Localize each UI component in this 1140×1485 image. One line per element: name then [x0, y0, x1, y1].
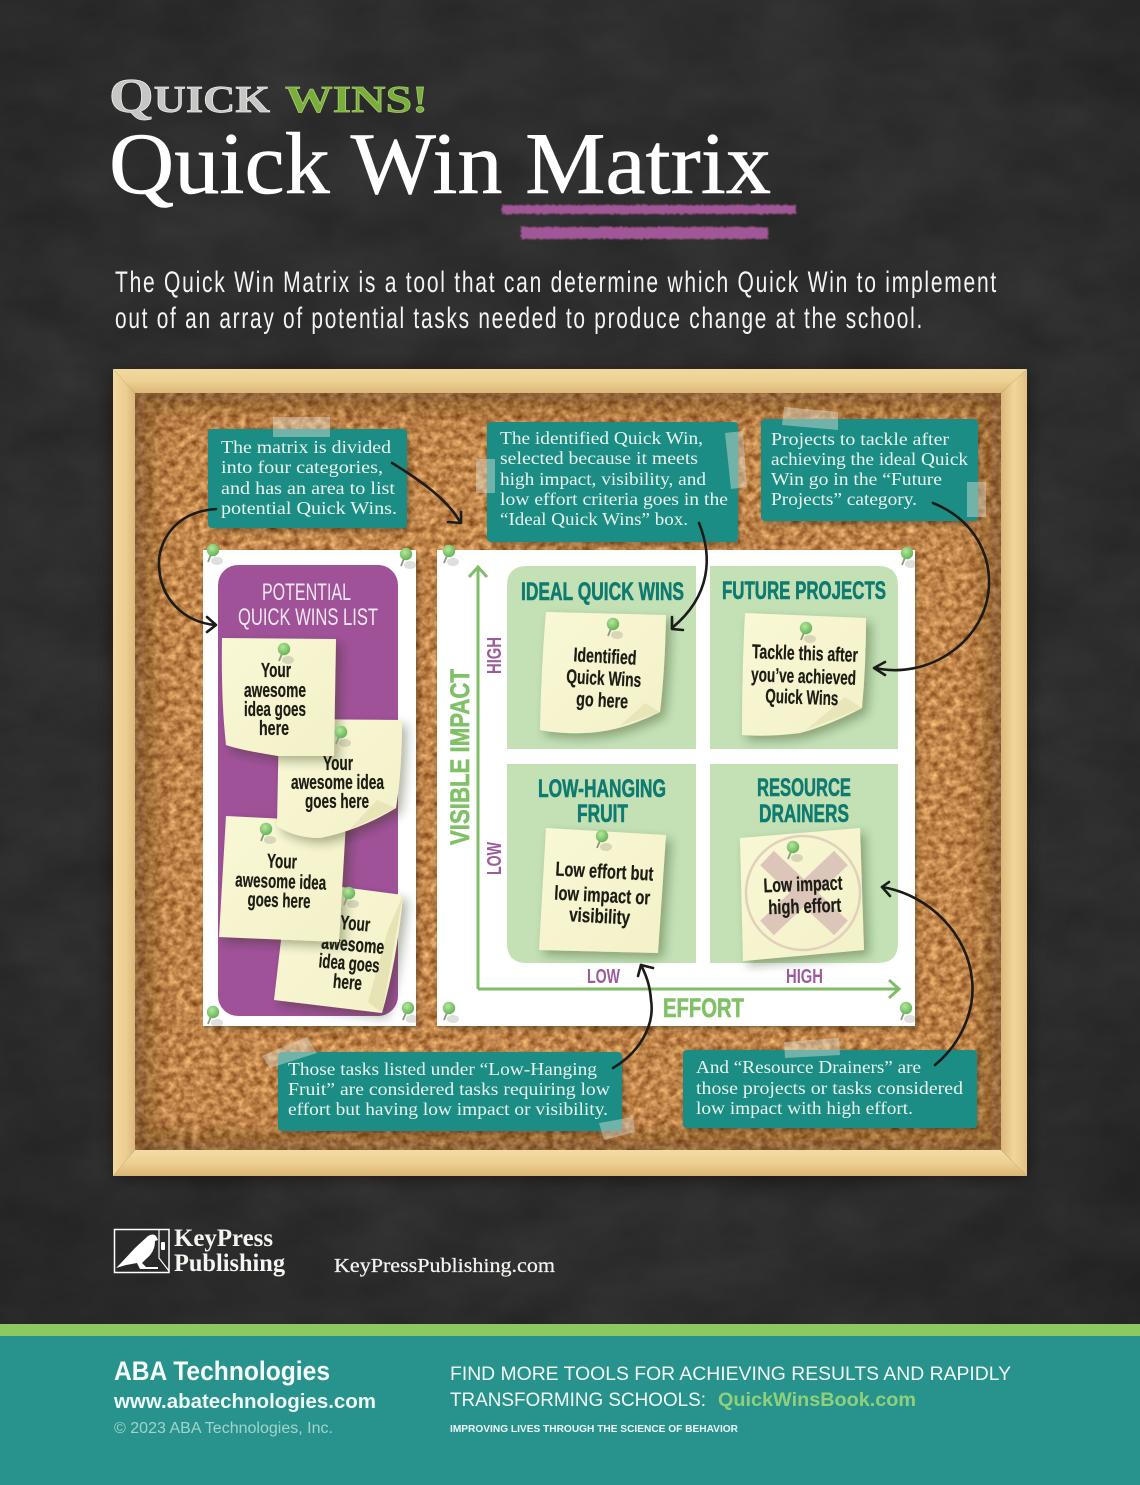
- sticky note 3: Your: [267, 851, 297, 874]
- sticky: tackle this after: Quick Wins: [765, 686, 839, 710]
- note: identified quick win: “Ideal Quick Wins” box.: [500, 509, 688, 529]
- tape: [262, 1037, 635, 1140]
- quadrant: ideal quick wins: IDEAL QUICK WINS: [521, 578, 684, 606]
- note: four categories: and has an area to list: [221, 478, 395, 498]
- footer: ABA Technologies: ABA Technologies: [114, 1356, 330, 1386]
- note: four categories: [208, 429, 407, 528]
- sticky note 2: goes here: [305, 791, 369, 813]
- note: four categories: into four categories,: [221, 457, 383, 477]
- list heading: POTENTIAL: [262, 579, 351, 606]
- arrow: to potential list: [159, 509, 216, 632]
- sticky: low effort: Low effort but: [555, 859, 654, 886]
- sticky note 1: idea goes: [244, 699, 306, 721]
- note: future projects: achieving the ideal Quick: [771, 449, 968, 469]
- list heading: [238, 579, 378, 631]
- main title: Quick Win Matrix: [109, 116, 771, 213]
- vertical axis: visible impact: LOW: [484, 842, 506, 875]
- sticky: identified quick wins: go here: [576, 689, 629, 713]
- tape: [273, 417, 330, 437]
- sticky: low effort: low impact or: [554, 883, 651, 910]
- logo: KeyPress Publishing: Publishing: [174, 1250, 285, 1277]
- sticky: low impact high effort: [740, 828, 864, 961]
- quadrant: future projects: FUTURE PROJECTS: [722, 577, 886, 605]
- icon: pigeon in box: [114, 1230, 169, 1272]
- tape: [784, 1038, 840, 1058]
- footer: ABA Technologies: [113, 1356, 376, 1437]
- sticky note 1: awesome: [244, 680, 306, 702]
- intro paragraph: [115, 266, 998, 335]
- logo: KeyPress Publishing: KeyPress: [174, 1225, 273, 1252]
- sticky: low impact high effort: Low impact: [763, 873, 843, 897]
- vertical axis: visible impact: VISIBLE IMPACT: [445, 669, 475, 845]
- horizontal axis: effort: LOW: [587, 966, 620, 988]
- footer: call to action: TRANSFORMING SCHOOLS:: [450, 1390, 706, 1411]
- vertical axis: visible impact: [445, 567, 506, 989]
- push pins: [207, 544, 917, 1027]
- sticky: low impact high effort: high effort: [768, 895, 842, 919]
- footer band: [0, 1324, 1140, 1485]
- arrow: to low-hanging fruit: [613, 965, 653, 1068]
- quadrant: ideal quick wins: [507, 566, 696, 749]
- note: future projects: Win go in the “Future: [771, 469, 942, 489]
- note: identified quick win: low effort criteria goes in the: [500, 489, 728, 509]
- sticky: identified quick wins: Identified: [573, 644, 637, 670]
- sticky: low effort: [539, 828, 666, 953]
- sticky note 1: here: [259, 718, 289, 740]
- quadrant: low-hanging fruit: LOW-HANGING: [538, 775, 666, 803]
- sticky note 2: awesome idea: [291, 772, 385, 794]
- horizontal axis: effort: HIGH: [786, 966, 823, 988]
- sticky note 2: Your: [323, 753, 353, 775]
- quadrant: resource drainers: DRAINERS: [759, 800, 849, 828]
- list heading: QUICK WINS LIST: [238, 604, 378, 631]
- quadrant: low-hanging fruit: [507, 764, 696, 963]
- tape: [476, 431, 747, 493]
- horizontal axis: effort: EFFORT: [663, 993, 744, 1023]
- footer: ABA Technologies: © 2023 ABA Technologies, Inc.: [114, 1420, 333, 1437]
- quadrant: low-hanging fruit: FRUIT: [577, 800, 628, 828]
- quadrant: future projects: [710, 566, 898, 749]
- note: identified quick win: high impact, visibility, and: [500, 469, 706, 489]
- eyebrow title: Quick Wins!: WINS!: [285, 79, 428, 121]
- arrow: to ideal quick wins area: [392, 463, 461, 523]
- quadrant: resource drainers: [710, 764, 898, 963]
- footer: call to action: IMPROVING LIVES THROUGH THE SCIENCE OF BEHAVIOR: [450, 1423, 738, 1435]
- note: low-hanging fruit: Those tasks listed under “Low-Hanging: [288, 1059, 597, 1079]
- cork board with wooden frame: [113, 369, 1027, 1178]
- footer: call to action: QuickWinsBook.com: [718, 1390, 916, 1411]
- note: low-hanging fruit: effort but having low impact or visibility.: [288, 1099, 608, 1119]
- publisher url: KeyPressPublishing.com: [334, 1255, 555, 1277]
- note: resource drainers: those projects or tasks considered: [696, 1078, 963, 1098]
- sticky: identified quick wins: [540, 612, 666, 733]
- footer: call to action: FIND MORE TOOLS FOR ACHIEVING RESULTS AND RAPIDLY: [450, 1364, 1011, 1385]
- note: resource drainers: [683, 1050, 977, 1128]
- note: resource drainers: low impact with high effort.: [696, 1098, 913, 1118]
- note: identified quick win: selected because it meets: [500, 448, 698, 468]
- eyebrow title: Quick Wins!: [109, 68, 428, 123]
- note: future projects: [761, 419, 978, 521]
- eyebrow title: Quick Wins!: QUICK: [109, 68, 271, 123]
- sticky note 4: here: [332, 971, 363, 995]
- arrow: to resource drainers: [882, 882, 973, 1065]
- sticky note 4: Your: [339, 912, 371, 937]
- sticky note 1: [222, 638, 336, 756]
- sticky note 3: [219, 816, 346, 942]
- sticky note 3: goes here: [247, 889, 311, 913]
- logo: KeyPress Publishing: [114, 1225, 285, 1277]
- icon: crossed-out circle: [746, 836, 860, 950]
- note: four categories: potential Quick Wins.: [221, 498, 397, 518]
- sticky note 4: idea goes: [318, 950, 380, 978]
- sticky note 4: awesome: [320, 931, 385, 959]
- arrow: to ideal sticky: [672, 523, 707, 630]
- tape: [782, 407, 986, 517]
- sticky note 4: [274, 880, 403, 1013]
- sticky: identified quick wins: Quick Wins: [566, 666, 642, 692]
- sticky note 3: awesome idea: [235, 869, 327, 895]
- panel: potential quick wins list: [203, 550, 416, 1026]
- footer: call to action: [450, 1364, 1011, 1435]
- note: future projects: Projects” category.: [771, 489, 917, 509]
- panel: quick win matrix: [437, 550, 915, 1026]
- sticky note 2: [277, 719, 402, 838]
- note: identified quick win: The identified Quick Win,: [500, 428, 703, 448]
- sticky: tackle this after: you’ve achieved: [751, 664, 856, 690]
- sticky: low effort: visibility: [569, 904, 631, 930]
- horizontal axis: effort: [478, 966, 899, 1023]
- note: future projects: Projects to tackle after: [771, 429, 949, 449]
- note: low-hanging fruit: Fruit” are considered tasks requiring low: [288, 1079, 610, 1099]
- sticky: tackle this after: [742, 613, 866, 736]
- note: four categories: The matrix is divided: [221, 437, 391, 457]
- vertical axis: visible impact: HIGH: [484, 637, 506, 674]
- quadrant: resource drainers: RESOURCE: [757, 774, 851, 802]
- sticky note 1: Your: [261, 660, 291, 682]
- note: identified quick win: [487, 422, 738, 542]
- chalk underlines: [502, 205, 796, 239]
- note: low-hanging fruit: [278, 1052, 622, 1131]
- note: resource drainers: And “Resource Drainers” are: [696, 1057, 921, 1077]
- arrow: to future projects sticky: [874, 503, 989, 675]
- footer: ABA Technologies: www.abatechnologies.com: [113, 1391, 376, 1413]
- sticky: tackle this after: Tackle this after: [752, 641, 858, 667]
